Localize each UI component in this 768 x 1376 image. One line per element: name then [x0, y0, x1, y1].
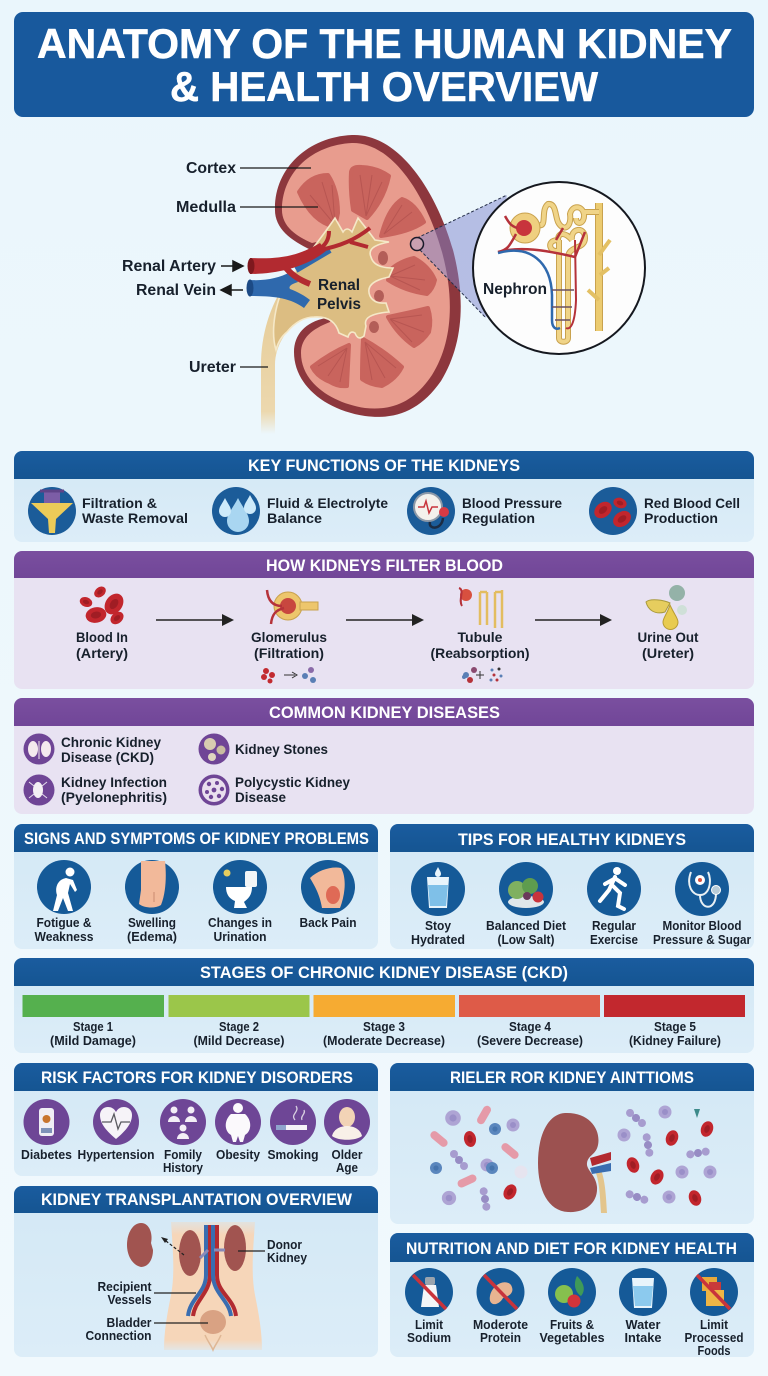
label: older age — [332, 1147, 362, 1175]
label: bladder connection: Bladder — [106, 1315, 152, 1330]
panel: nutrition and diet — [390, 1233, 754, 1358]
step: blood in: Blood In — [76, 629, 128, 645]
label: limit processed foods: Limit — [700, 1317, 729, 1332]
panel: key functions — [14, 451, 754, 542]
kidney anatomy diagram — [122, 135, 645, 434]
icon: kidney stones — [198, 734, 230, 764]
title banner: & HEALTH OVERVIEW — [170, 63, 598, 110]
icon: urine drops — [646, 585, 687, 630]
text: fluid balance: Balance — [267, 510, 322, 526]
title banner — [14, 12, 754, 117]
arrow — [535, 614, 612, 626]
arrow — [346, 614, 424, 626]
label: obesity: Obesity — [216, 1147, 261, 1162]
stage 1 label: Stage 1 — [73, 1019, 113, 1034]
text: filtration: Filtration & — [82, 495, 157, 511]
kidney outer — [275, 135, 461, 417]
panel: tips for healthy kidneys: TIPS FOR HEALTHY KIDNEYS — [458, 830, 686, 849]
stage 3 label — [323, 1019, 445, 1048]
label: regular exercise: Regular — [592, 918, 636, 933]
icon: stethoscope — [675, 862, 729, 916]
particles — [429, 1104, 716, 1212]
icon: swelling — [125, 860, 179, 914]
icon: reabsorbed particles — [462, 667, 502, 683]
panel: common kidney diseases: COMMON KIDNEY DISEASES — [269, 703, 500, 722]
panel: risk factors — [14, 1063, 378, 1176]
kidney: left in body — [179, 1230, 201, 1276]
icon: salad — [499, 862, 553, 916]
text: CKD: Disease (CKD) — [61, 749, 154, 765]
label: fatigue: Weakness — [34, 929, 94, 944]
text: red blood cell: Red Blood Cell — [644, 495, 740, 511]
icon: limit processed foods — [690, 1268, 738, 1316]
text: CKD — [61, 734, 161, 765]
step: urine out — [638, 629, 699, 661]
label: balanced diet — [486, 918, 567, 947]
label: fatigue: Fotigue & — [36, 915, 92, 930]
stage 2 label — [194, 1019, 284, 1048]
label: stay hydrated: Stoy — [425, 918, 452, 933]
text: fluid balance — [267, 495, 388, 526]
label: limit processed foods — [684, 1317, 744, 1358]
step: urine out: (Ureter) — [642, 645, 694, 661]
icon: filtered particles — [261, 667, 316, 684]
panel: risk factors: RISK FACTORS FOR KIDNEY DISORDERS — [41, 1068, 353, 1087]
label: fruits and vegetables: Vegetables — [540, 1330, 604, 1345]
label: fruits and vegetables: Fruits & — [550, 1317, 594, 1332]
label: changes in urination: Urination — [214, 929, 267, 944]
label: limit sodium — [407, 1317, 451, 1345]
stage 5 label: Stage 5 — [654, 1019, 696, 1034]
icon: filtration funnel — [28, 487, 76, 535]
stage 4 bar — [459, 995, 600, 1017]
stage 3 bar — [314, 995, 455, 1017]
step: urine out: Urine Out — [638, 629, 699, 645]
label: changes in urination — [208, 915, 272, 944]
icon: polycystic kidney — [198, 774, 230, 806]
kidney: right in body — [224, 1225, 246, 1271]
panel: signs and symptoms: SIGNS AND SYMPTOMS OF KIDNEY PROBLEMS — [24, 829, 369, 848]
body torso — [164, 1222, 262, 1350]
stage 1 bar — [22, 995, 164, 1017]
label: stay hydrated: Hydrated — [411, 932, 465, 947]
text: polycystic: Polycystic Kidney — [235, 774, 350, 790]
label: balanced diet: Balanced Diet — [486, 918, 567, 933]
panel: key functions: KEY FUNCTIONS OF THE KIDNEYS — [248, 456, 520, 475]
label: monitor blood pressure: Monitor Blood — [662, 918, 742, 933]
icon: chronic kidney disease — [24, 734, 54, 764]
icon: water intake — [619, 1268, 667, 1316]
icon: limit sodium — [405, 1268, 453, 1316]
icon: blood pressure gauge — [407, 487, 455, 535]
stage 1 label — [50, 1019, 136, 1048]
label: bladder connection — [86, 1315, 208, 1343]
bladder — [200, 1310, 226, 1350]
kidney illustration — [538, 1113, 611, 1213]
label: donor kidney — [238, 1237, 308, 1265]
dark calyx tips — [369, 251, 388, 333]
label: recipient vessels — [98, 1279, 196, 1307]
icon: water glass — [411, 862, 465, 916]
text: filtration: Waste Removal — [82, 510, 188, 526]
panel: stages of CKD: STAGES OF CHRONIC KIDNEY DISEASE (CKD) — [200, 963, 568, 982]
stage 1 label: (Mild Damage) — [50, 1033, 136, 1048]
panel: how kidneys filter blood — [14, 551, 754, 689]
step: glomerulus: (Filtration) — [254, 645, 324, 661]
step: tubule: Tubule — [458, 629, 503, 645]
panel: stages of CKD — [14, 958, 754, 1053]
text: red blood cell — [644, 495, 740, 526]
text: fluid balance: Fluid & Electrolyte — [267, 495, 388, 511]
step: blood in — [76, 629, 128, 661]
renal artery — [248, 228, 370, 284]
label: moderate protein: Protein — [480, 1330, 521, 1345]
stage 5 bar — [604, 995, 745, 1017]
icon: droplets — [212, 487, 260, 535]
icon: runner — [587, 862, 641, 916]
stage 5 label — [629, 1019, 721, 1048]
panel: common kidney diseases — [14, 698, 754, 814]
label: limit sodium: Sodium — [407, 1330, 451, 1345]
label: stay hydrated — [411, 918, 465, 947]
zoom cone — [417, 195, 507, 318]
label: swelling: Swelling — [128, 915, 176, 930]
label: family history — [163, 1147, 204, 1175]
icon: blood cells — [78, 584, 127, 627]
nephron circle — [473, 182, 645, 354]
label: nephron: Nephron — [483, 281, 547, 298]
arrow: donor to recipient — [161, 1237, 184, 1255]
stage 4 label: (Severe Decrease) — [477, 1033, 583, 1048]
label: fatigue — [34, 915, 94, 944]
panel: unreadable kidney particles — [390, 1063, 754, 1224]
icon: hypertension — [93, 1099, 139, 1145]
text: CKD: Chronic Kidney — [61, 734, 161, 750]
label: donor kidney: Donor — [267, 1237, 302, 1252]
label: water intake: Water — [626, 1317, 660, 1332]
text: filtration — [82, 495, 188, 526]
label: older age: Older — [332, 1147, 362, 1162]
text: polycystic: Disease — [235, 789, 286, 805]
label: diabetes: Diabetes — [21, 1147, 72, 1162]
label: family history: History — [163, 1160, 204, 1175]
pyramid striations — [310, 175, 425, 382]
icon: older age — [324, 1099, 370, 1145]
step: glomerulus — [251, 629, 327, 661]
icon: fruits and vegetables — [548, 1268, 596, 1316]
renal vein — [246, 250, 330, 308]
icon: moderate protein — [476, 1268, 524, 1316]
panel: kidney transplantation — [14, 1186, 378, 1357]
text: kidney infection: Kidney Infection — [61, 774, 167, 790]
label: swelling — [127, 915, 177, 944]
cortex — [282, 143, 450, 409]
icon: red blood cells — [589, 487, 637, 535]
stage 4 label: Stage 4 — [509, 1019, 552, 1034]
stage 2 bar — [168, 995, 310, 1017]
label: donor kidney: Kidney — [267, 1250, 308, 1265]
panel: how kidneys filter blood: HOW KIDNEYS FILTER BLOOD — [266, 556, 503, 575]
kidney anatomy diagram: Pelvis — [317, 296, 361, 313]
vessels — [188, 1225, 236, 1316]
icon: tubule — [459, 588, 502, 628]
label: regular exercise — [590, 918, 638, 947]
arrow — [156, 614, 234, 626]
label: recipient vessels: Recipient — [98, 1279, 152, 1294]
step: glomerulus: Glomerulus — [251, 629, 327, 645]
label: swelling: (Edema) — [127, 929, 177, 944]
donor kidney outside body — [127, 1223, 153, 1267]
label: moderate protein — [473, 1317, 528, 1345]
label: medulla: Medulla — [176, 199, 236, 216]
pelvis and calyces — [274, 218, 393, 350]
label: older age: Age — [336, 1160, 358, 1175]
label: recipient vessels: Vessels — [108, 1292, 152, 1307]
icon: fatigue — [37, 860, 91, 914]
label: changes in urination: Changes in — [208, 915, 272, 930]
label: bladder connection: Connection — [86, 1328, 152, 1343]
icon: kidney infection — [24, 774, 54, 806]
nephron tubes — [595, 203, 603, 331]
label: ureter: Ureter — [189, 359, 236, 376]
label: moderate protein: Moderote — [473, 1317, 528, 1332]
stage 2 label: (Mild Decrease) — [194, 1033, 284, 1048]
label: fruits and vegetables — [540, 1317, 604, 1345]
label: back pain: Back Pain — [300, 915, 357, 930]
icon: toilet — [213, 860, 267, 914]
label: water intake — [624, 1317, 662, 1345]
label: limit sodium: Limit — [415, 1317, 444, 1332]
icon: back pain — [301, 860, 355, 914]
text: blood pressure: Blood Pressure — [462, 495, 562, 511]
icon: obesity — [215, 1099, 261, 1145]
step: tubule — [430, 629, 530, 661]
panel: nutrition and diet: NUTRITION AND DIET FOR KIDNEY HEALTH — [406, 1239, 737, 1258]
text: red blood cell: Production — [644, 510, 718, 526]
step: blood in: (Artery) — [76, 645, 128, 661]
text: polycystic — [235, 774, 350, 805]
icon: family history — [160, 1099, 206, 1145]
label: regular exercise: Exercise — [590, 932, 638, 947]
label: water intake: Intake — [624, 1330, 662, 1345]
label: renal vein: Renal Vein — [136, 282, 216, 299]
icon: diabetes — [24, 1099, 70, 1145]
stage 3 label: Stage 3 — [363, 1019, 405, 1034]
panel: unreadable kidney particles: RIELER ROR KIDNEY AINTTIOMS — [450, 1068, 694, 1087]
stage 4 label — [477, 1019, 583, 1048]
text: kidney stones: Kidney Stones — [235, 741, 328, 757]
label: family history: Fomily — [164, 1147, 203, 1162]
label: monitor blood pressure: Pressure & Sugar — [653, 932, 751, 947]
label: smoking: Smoking — [268, 1147, 319, 1162]
stage 5 label: (Kidney Failure) — [629, 1033, 721, 1048]
label: balanced diet: (Low Salt) — [498, 932, 554, 947]
text: kidney infection: (Pyelonephritis) — [61, 789, 167, 805]
panel: tips for healthy kidneys — [390, 824, 754, 949]
text: blood pressure: Regulation — [462, 510, 535, 526]
label: limit processed foods: Processed — [684, 1330, 744, 1345]
label: cortex: Cortex — [186, 160, 236, 177]
text: blood pressure — [462, 495, 562, 526]
text: kidney infection — [61, 774, 167, 805]
title banner: ANATOMY OF THE HUMAN KIDNEY — [37, 20, 732, 67]
panel: kidney transplantation: KIDNEY TRANSPLANTATION OVERVIEW — [41, 1190, 353, 1209]
stage 3 label: (Moderate Decrease) — [323, 1033, 445, 1048]
step: tubule: (Reabsorption) — [430, 645, 530, 661]
label: hypertension: Hypertension — [78, 1147, 155, 1162]
stage 2 label: Stage 2 — [219, 1019, 259, 1034]
label: monitor blood pressure — [653, 918, 751, 947]
icon: glomerulus — [267, 590, 318, 624]
label: renal pelvis: Renal — [318, 277, 360, 294]
label: limit processed foods: Foods — [698, 1343, 730, 1358]
ureter — [261, 283, 305, 434]
label: renal artery: Renal Artery — [122, 258, 216, 275]
medulla pyramids — [299, 167, 435, 386]
panel: signs and symptoms — [14, 824, 378, 949]
icon: smoking — [270, 1099, 316, 1145]
